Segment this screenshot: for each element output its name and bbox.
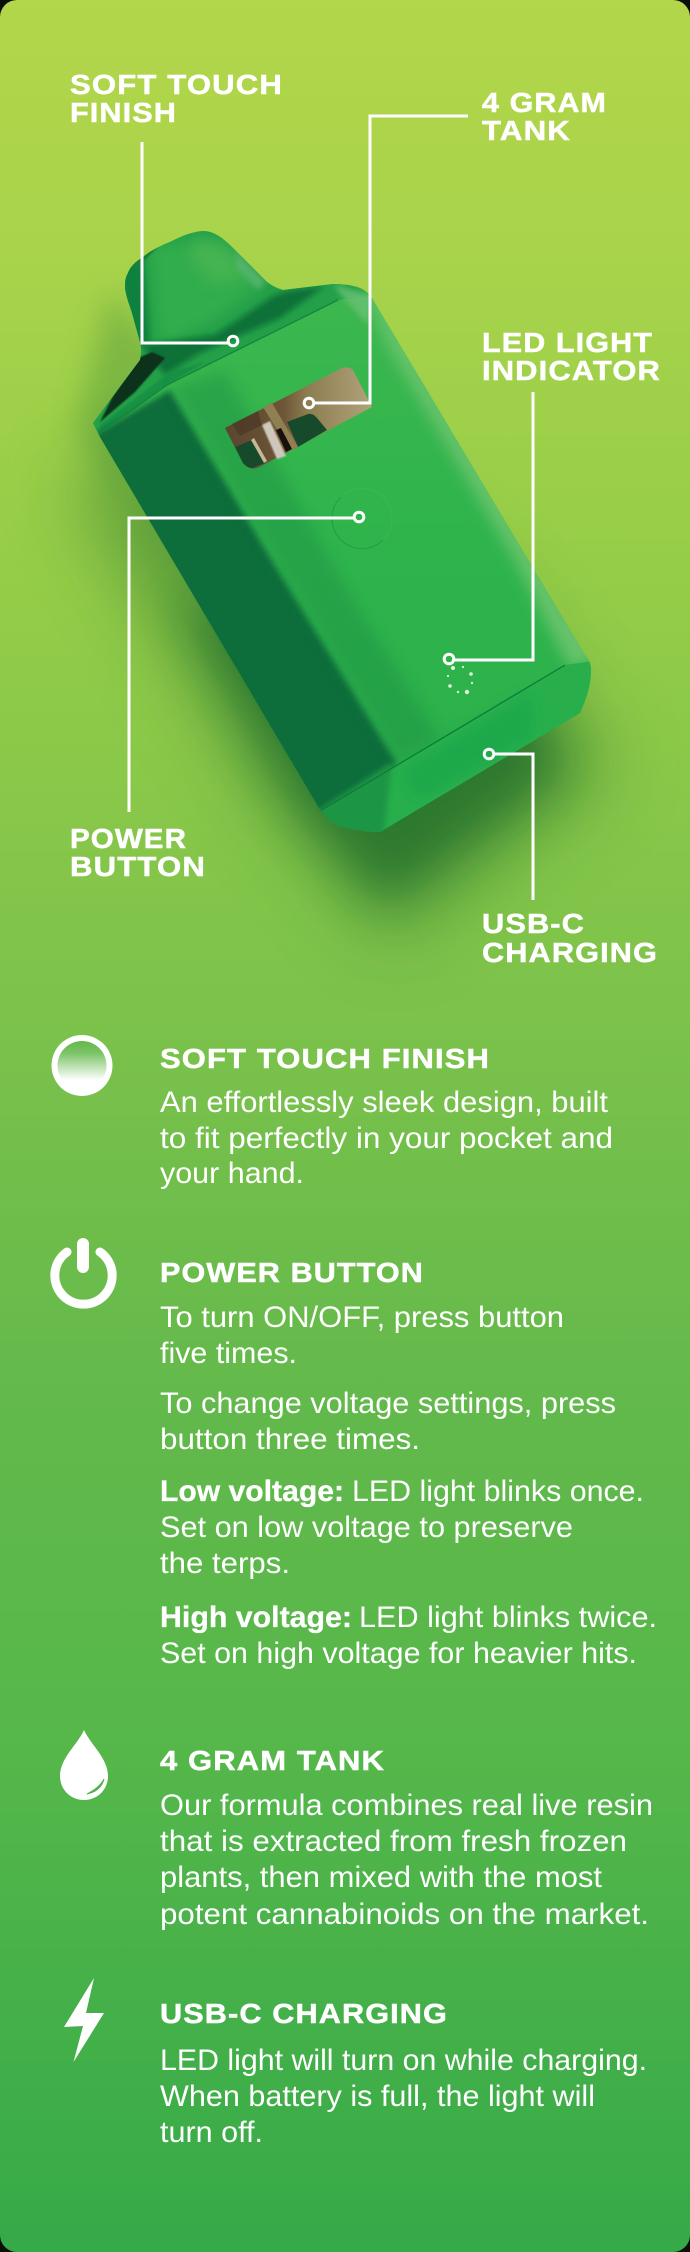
section: soft touch finish: to fit perfectly in your pocket and [160,1122,613,1155]
section: power button: LED light blinks once. [352,1475,644,1508]
label: LED light indicator: LED LIGHT [482,327,653,358]
vape device [80,220,610,845]
label: power button [70,823,206,882]
section: soft touch finish: SOFT TOUCH FINISH [160,1043,490,1074]
icon: power symbol [55,1244,112,1304]
section: 4 gram tank: 4 GRAM TANK [160,1745,385,1776]
section: power button: the terps. [160,1547,290,1580]
section: USB-C charging: USB-C CHARGING [160,1998,448,2029]
section: power button: LED light blinks twice. [359,1601,657,1634]
section: soft touch finish [160,1043,613,1190]
power button recess [332,488,392,549]
icon: oil drop [60,1730,108,1800]
label: power button: POWER [70,823,187,854]
section: USB-C charging: turn off. [160,2116,263,2149]
label: 4 gram tank: 4 GRAM [482,87,607,118]
LED dot ring [447,666,473,694]
icon: soft touch circle [52,1035,112,1096]
section: 4 gram tank: potent cannabinoids on the market. [160,1898,649,1931]
label: soft touch finish: SOFT TOUCH [70,69,283,100]
device main face [80,220,610,840]
section: 4 gram tank [160,1745,653,1931]
section: power button: To change voltage settings, press [160,1387,616,1420]
section: power button [160,1257,657,1670]
section: power button: Set on low voltage to preserve [160,1511,573,1544]
light right bevel [362,286,600,668]
section: 4 gram tank: Our formula combines real live resin [160,1789,653,1822]
dark left face [90,390,397,822]
section: power button: five times. [160,1337,297,1370]
callout line: power [129,512,364,812]
section: power button: POWER BUTTON [160,1257,424,1288]
section: power button: Low voltage: [160,1475,344,1508]
label: USB-C charging [482,908,658,968]
section: USB-C charging: When battery is full, the light will [160,2080,595,2113]
label: power button: BUTTON [70,851,206,882]
mouthpiece and shoulder [93,231,368,432]
section: soft touch finish: your hand. [160,1157,304,1190]
label: USB-C charging: USB-C [482,908,585,939]
callout line: 4 gram tank [304,116,468,408]
callout line: soft touch [142,142,238,346]
icon: lightning bolt [64,1978,104,2062]
section: power button: Set on high voltage for heavier hits. [160,1637,637,1670]
section: power button: High voltage: [160,1601,352,1634]
section: 4 gram tank: plants, then mixed with the most [160,1861,602,1894]
callout line: LED [444,392,533,664]
tank inner highlights [232,403,298,463]
window into tank [225,367,372,469]
label: LED light indicator [482,327,661,386]
section: soft touch finish: An effortlessly sleek design, built [160,1086,608,1119]
device shadow [70,290,610,940]
tank inner green panels [235,414,327,468]
callout line: USB-C [484,749,533,900]
label: USB-C charging: CHARGING [482,937,658,968]
section: 4 gram tank: that is extracted from fresh frozen [160,1825,627,1858]
label: soft touch finish [70,69,283,128]
label: LED light indicator: INDICATOR [482,355,661,386]
section: power button: To turn ON/OFF, press button [160,1301,564,1334]
label: soft touch finish: FINISH [70,97,177,128]
section: USB-C charging: LED light will turn on while charging. [160,2044,647,2077]
section: power button: button three times. [160,1423,420,1456]
label: 4 gram tank [482,87,607,146]
seam lines [100,300,565,810]
section: USB-C charging [160,1998,647,2149]
label: 4 gram tank: TANK [482,115,571,146]
bottom cap [318,662,591,832]
